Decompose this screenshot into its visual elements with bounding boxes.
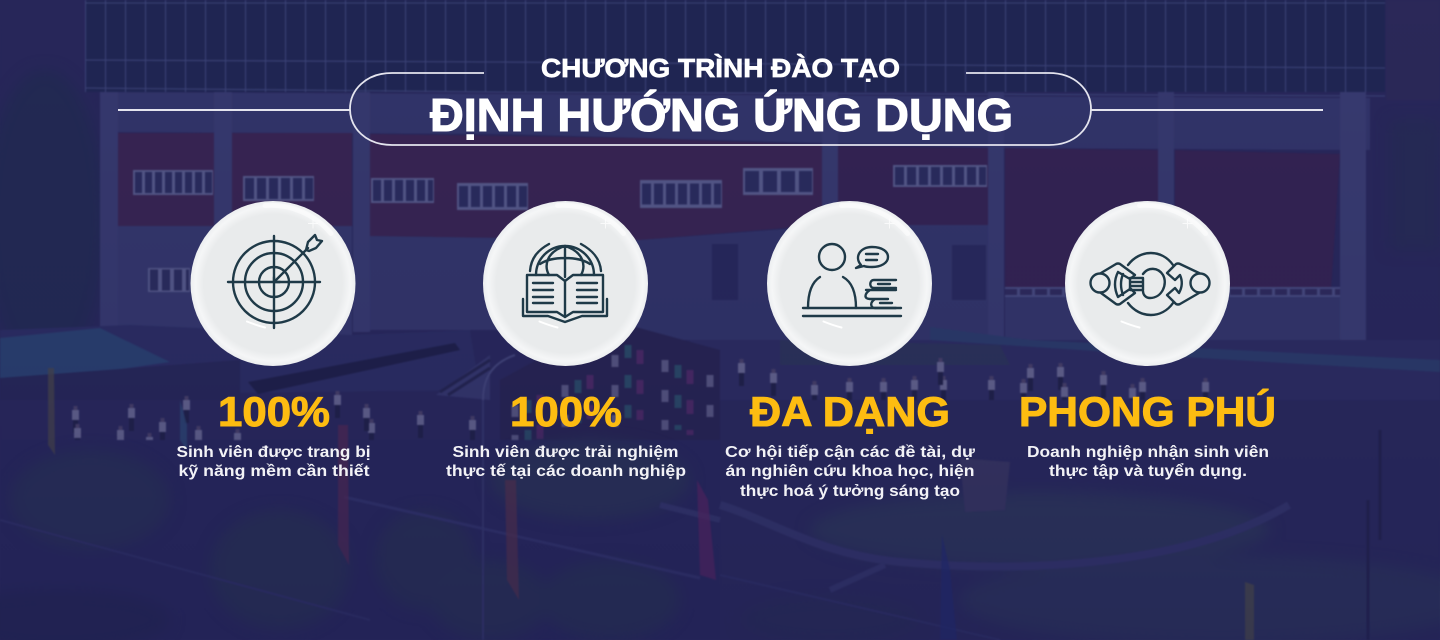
description [176,444,370,480]
description: thực tế tại các doanh nghiệp [446,463,686,480]
description: Doanh nghiệp nhận sinh viên [1027,444,1269,461]
people [72,406,79,433]
header frame: pill outline and side rules [118,73,1323,145]
doorways and railings [952,245,986,300]
windows [133,165,987,292]
heading: eyebrow: CHƯƠNG TRÌNH ĐÀO TẠO [541,53,900,83]
column 4: business partners [1019,201,1276,480]
left and right foliage [0,70,1440,370]
stat: 100%: 100% [510,388,622,435]
lamp posts [1368,430,1380,640]
flags [48,368,1254,640]
description [1027,444,1269,480]
icon disc: globe and book [483,201,648,366]
column 3: research opportunities [725,201,976,500]
description: kỹ năng mềm cần thiết [178,463,370,480]
heading: main title: ĐỊNH HƯỚNG ỨNG DỤNG [430,89,1013,141]
paths [344,497,700,578]
description: Sinh viên được trang bị [176,444,370,461]
icon disc: person with books [767,201,932,366]
description: thực hoá ý tưởng sáng tạo [740,483,960,500]
red walls [118,133,214,226]
description: án nghiên cứu khoa học, hiện [726,463,974,480]
column 1: soft skills [176,201,370,480]
description: Cơ hội tiếp cận các đề tài, dự [725,444,976,461]
stat: 100%: 100% [218,388,330,435]
ground floor walls [118,226,352,336]
white concrete beam [100,92,1370,150]
stat: ĐA DẠNG: ĐA DẠNG [750,388,950,435]
description [446,444,686,480]
glass upper storey [85,0,1385,92]
stat: PHONG PHÚ: PHONG PHÚ [1019,387,1276,435]
lower ground, trees and lawn [0,440,720,640]
central student crowd [500,320,720,440]
icon disc: target [190,201,356,366]
icon disc: linked handshake [1065,201,1230,366]
plaza, pool and garden bed [0,325,480,395]
description: Sinh viên được trải nghiệm [452,444,678,461]
column 2: enterprise experience [446,201,686,480]
sign [960,458,1010,512]
columns [100,92,118,332]
description [725,444,976,500]
description: thực tập và tuyển dụng. [1049,463,1247,480]
